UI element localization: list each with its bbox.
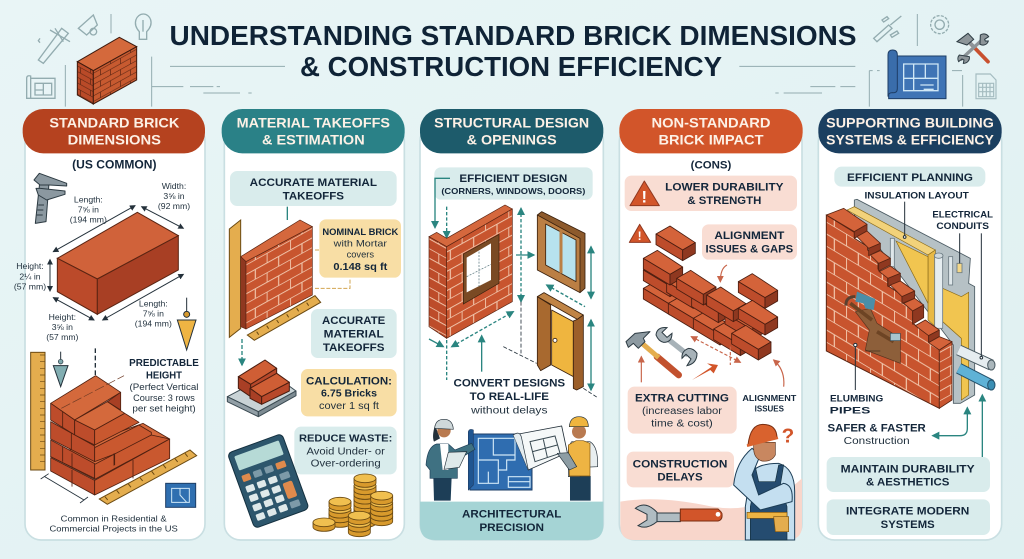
title: & CONSTRUCTION EFFICIENCY [300,51,722,82]
text: convert designs [453,378,566,416]
header: SUPPORTING BUILDING [826,115,994,131]
icon: brick block [77,37,137,104]
label: top length [70,195,107,224]
icon: blueprint [468,429,532,490]
icon: bricks on pallet [227,360,296,417]
figure: worried worker [734,424,795,540]
callout: extra cutting: EXTRA CUTTING [635,393,729,405]
callout: nominal brick: NOMINAL BRICK [322,227,399,237]
callout: lower durability: & STRENGTH [687,195,761,207]
icon: calculator [227,433,309,529]
header [619,109,803,153]
icon: warning [630,181,659,206]
footnote: Commercial Projects in the US [49,524,178,534]
panel: supporting building systems and efficiency [818,109,1002,540]
callout: alignment gaps: ALIGNMENT [714,230,785,242]
label: width: Width: [162,181,186,191]
header [23,109,205,153]
people and plans scene [426,417,598,501]
icon: large wrench [635,505,722,527]
label: top length: 7⅝ in [78,204,99,214]
label: left height: (57 mm) [14,281,46,291]
label: alignment issues: ALIGNMENT [742,394,796,403]
callout: calculation: cover 1 sq ft [319,401,379,412]
callout: reduce waste: Over-ordering [311,459,381,470]
card [25,125,205,540]
callout: lower durability [625,176,797,211]
label: electrical conduits: ELECTRICAL [932,210,994,220]
footer band: architectural precision: PRECISION [479,522,544,534]
icon: caliper [38,28,70,63]
brick face [826,215,939,408]
icon: gear [931,16,949,34]
callout: efficient planning: EFFICIENT PLANNING [847,172,973,184]
callout: integrate modern: SYSTEMS [881,519,935,531]
header [420,109,603,153]
label: alignment issues: ISSUES [755,405,785,414]
callout: construction delays [627,452,734,487]
label: bottom height: Height: [49,312,76,322]
label: left height: 2¼ in [19,271,41,281]
header: & OPENINGS [467,131,557,147]
header: MATERIAL TAKEOFFS [237,115,390,131]
centre line [93,348,97,375]
panel: structural design and openings [420,109,603,540]
icon: window [537,212,585,293]
label: left height [14,261,46,291]
icon: caliper [34,173,67,223]
callout: maintain durability: MAINTAIN DURABILITY [841,463,975,475]
callout: nominal brick: 0.148 sq ft [333,262,388,273]
corner brick wall with window [429,205,512,338]
predictable height text: Course: 3 rows [133,393,195,403]
callout: efficient planning [834,167,985,187]
brick stack [41,376,170,503]
label: plumbing pipes: PIPES [830,405,870,415]
callout: accurate material takeoffs second: MATERIAL [324,329,384,341]
callout: lower durability: LOWER DURABILITY [665,181,784,193]
wall section [826,199,995,408]
label: bottom height: 3⅝ in [52,322,73,332]
callout: calculation: 6.75 Bricks [321,389,377,400]
label: bottom length: (194 mm) [135,319,172,329]
text: convert designs: TO REAL-LIFE [470,391,549,403]
callout: maintain durability: & AESTHETICS [866,477,949,489]
card [619,125,802,540]
header: & ESTIMATION [262,131,365,147]
figure: man engineer [557,417,598,501]
icon: coin stacks [313,474,393,537]
predictable height text: HEIGHT [146,370,182,381]
figure: worried worker: ? [782,424,794,447]
callout: accurate material takeoffs second: ACCURATE [322,315,386,327]
arrows around wall [429,178,598,398]
icon group: right header decoration with blueprint [739,14,996,107]
brick with dimensions [50,206,183,320]
label: bottom length: 7⅝ in [143,309,164,319]
callout: accurate material takeoffs: ACCURATE MATERIAL [250,177,377,189]
text: convert designs: without delays [470,405,547,416]
icon: light bulb [135,14,151,39]
callout: reduce waste [294,427,397,474]
label: width: 3⅝ in [163,191,185,201]
header: STRUCTURAL DESIGN [434,115,589,131]
icon: vertical ruler [229,220,241,337]
brick wall [241,220,312,329]
arrow to bricks [240,339,244,365]
icon: screwdriver [874,16,901,42]
label: bottom height: (57 mm) [46,332,79,342]
header [222,109,405,153]
icon: calculator sheet [976,74,996,99]
text: safer and faster: SAFER & FASTER [827,423,926,435]
icon: wrench [656,328,697,366]
callout: accurate material takeoffs second [311,309,397,358]
header: BRICK IMPACT [658,131,764,147]
callout: alignment gaps [702,224,797,260]
subheading: (US COMMON) [72,158,157,171]
label: left height: Height: [16,261,44,271]
callout: calculation [301,369,397,416]
label: alignment issues [742,394,796,414]
footer band: architectural precision [420,502,603,540]
icon: white plan [513,426,567,470]
figure: woman engineer [426,419,475,501]
callout: construction delays: DELAYS [657,472,703,484]
icon: teal plumb bob [53,352,68,387]
footnote: Common in Residential & [61,514,167,524]
label: plumbing pipes: ELUMBING [830,394,883,404]
header [818,109,1002,153]
icon: vertical ruler [31,352,45,470]
label: bottom length [135,299,172,329]
header: STANDARD BRICK [49,115,179,131]
callout: nominal brick [319,219,401,278]
label: width: (92 mm) [158,201,190,211]
label: bottom height [46,312,79,342]
callout: accurate material takeoffs second: TAKEOFFS [323,342,385,354]
header: DIMENSIONS [68,131,161,147]
callout: reduce waste: REDUCE WASTE: [299,434,392,445]
misaligned brick wall [643,226,778,360]
callout: maintain durability [827,457,990,492]
callout: construction delays: CONSTRUCTION [633,458,727,470]
callout: nominal brick: with Mortar [333,239,387,249]
metal backing [854,199,975,403]
text: convert designs: CONVERT DESIGNS [453,378,566,390]
card [224,125,404,540]
arrows to wall [933,395,982,472]
callout: accurate material takeoffs: TAKEOFFS [283,190,344,202]
label: top length: Length: [74,195,103,205]
icon: floor ruler [99,450,197,504]
plumbing cutout [846,292,900,363]
icon: blueprint [888,50,946,99]
dimension arrows [50,206,183,320]
callout: efficient design: EFFICIENT DESIGN [459,173,567,185]
icon: yellow plumb bob [177,298,196,350]
callout: efficient design: (CORNERS, WINDOWS, DOORS) [441,186,585,196]
label: insulation layout: INSULATION LAYOUT [864,190,969,200]
panel: standard brick dimensions [14,109,205,540]
callout: nominal brick: covers [347,250,374,260]
icon: small blueprint [166,483,196,507]
icon: small warning: ! [638,229,642,243]
icon: warning: ! [642,187,647,206]
callout: accurate material takeoffs [230,171,397,206]
callout: extra cutting [628,387,737,434]
alignment arrows [641,265,784,387]
title: UNDERSTANDING STANDARD BRICK DIMENSIONS [170,20,856,51]
callout: efficient design [434,167,593,200]
callout: reduce waste: Avoid Under- or [306,446,386,457]
label: top length: (194 mm) [70,214,107,224]
subheading: (CONS) [691,159,732,171]
header: NON-STANDARD [651,115,770,131]
icon: hammer [626,332,679,375]
leader lines [854,202,983,390]
icon: house tool [78,15,97,35]
brick end and step caps [826,208,952,408]
panel: non-standard brick impact [619,109,803,540]
title [170,20,856,82]
predictable height text: per set height) [132,404,196,414]
footnote [49,514,178,534]
label: electrical conduits [932,210,994,231]
icon: door [537,293,583,390]
label: plumbing pipes [830,394,883,415]
panel: material takeoffs and estimation [222,109,405,540]
callout: calculation: CALCULATION: [306,375,392,387]
insulation [847,207,969,400]
callout: extra cutting: (increases labor [642,406,723,417]
label: electrical conduits: CONDUITS [936,221,989,231]
label: width [158,181,190,211]
callout: extra cutting: time & cost) [651,418,713,429]
footer band: architectural precision: ARCHITECTURAL [462,509,562,521]
icon: crossed hammer and wrench [957,33,989,63]
text: safer and faster [827,423,926,447]
icon: floor plan [27,76,55,98]
conduit strips [890,238,962,328]
pink ground [620,478,802,540]
card [420,125,603,540]
card [818,125,1002,540]
predictable height text: (Perfect Vertical [129,382,198,392]
callout: integrate modern [827,499,990,535]
text: safer and faster: Construction [844,436,910,447]
header: SYSTEMS & EFFICIENCY [826,131,994,147]
predictable height text: PREDICTABLE [129,358,199,369]
label: bottom length: Length: [139,299,168,309]
icon: small warning [629,224,651,243]
predictable height text [129,358,199,414]
icon group: left header decoration with brick block [27,14,285,107]
pipes [959,350,995,390]
callout: alignment gaps: ISSUES & GAPS [705,244,793,256]
callout: integrate modern: INTEGRATE MODERN [846,506,969,518]
icon: floor ruler [247,296,321,340]
